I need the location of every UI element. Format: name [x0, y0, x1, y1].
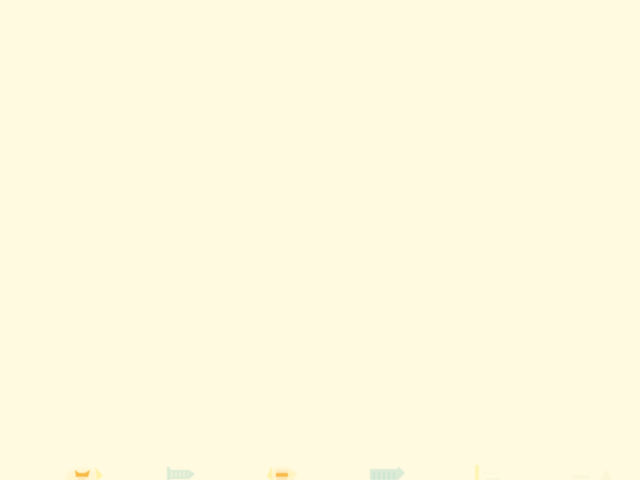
icon: faint shapes at right — [572, 470, 612, 480]
arrow: green tag 2 — [370, 466, 405, 480]
icon: faint yellow marker — [475, 465, 500, 480]
arrow: green tag 1 — [167, 467, 195, 480]
icon: orange badge 1 — [66, 467, 103, 480]
icon: orange badge 2 — [267, 466, 298, 480]
